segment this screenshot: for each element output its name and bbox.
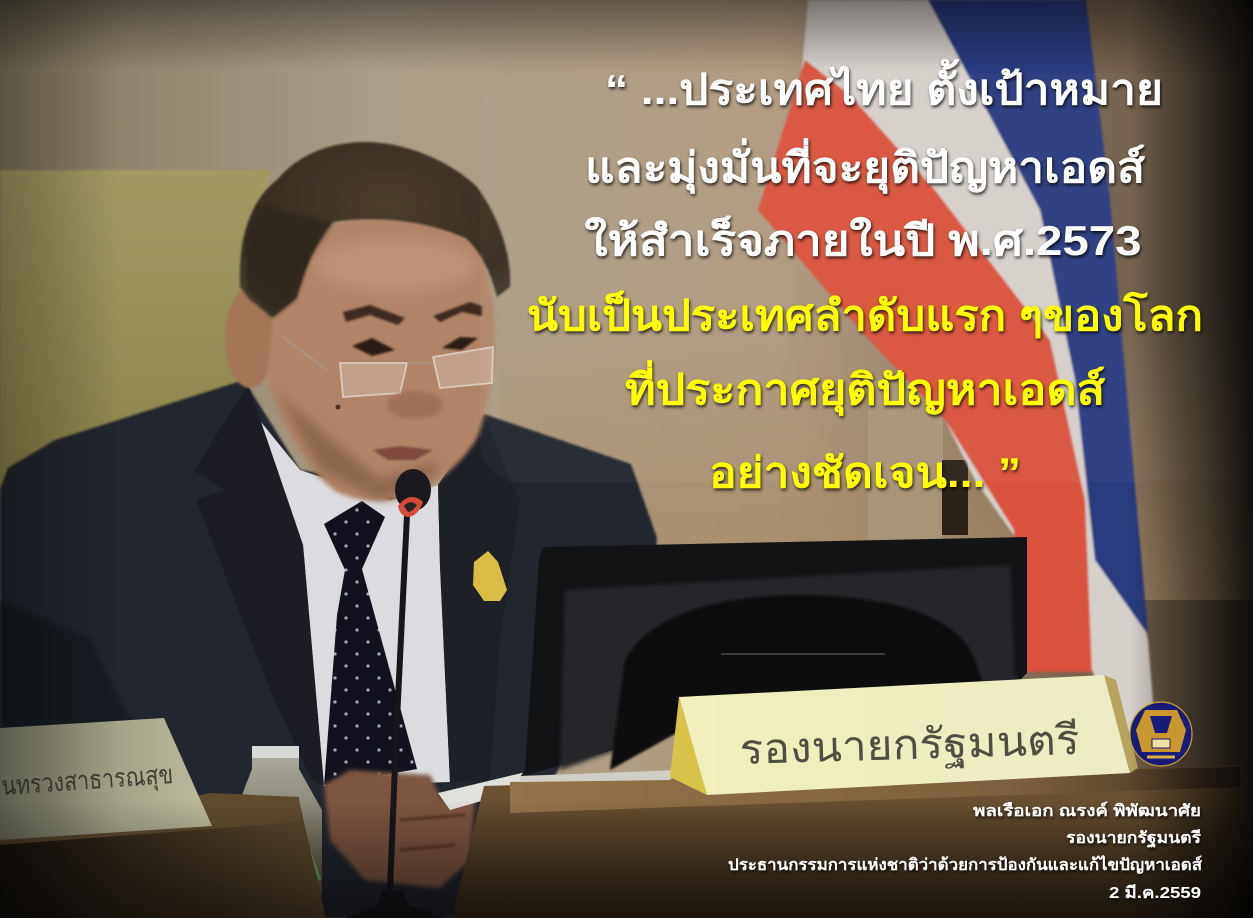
water bottle — [240, 746, 322, 895]
eyebrows — [343, 302, 482, 325]
man in suit — [0, 142, 657, 918]
quote line 1: “ ...ประเทศไทย ตั้งเป้าหมาย — [605, 58, 1163, 113]
dotted necktie — [324, 501, 417, 786]
left name plate — [0, 718, 212, 840]
deputy prime minister name plate: รองนายกรัฐมนตรี — [739, 716, 1080, 775]
monitor slot — [721, 653, 885, 655]
paper under hand — [438, 772, 526, 810]
quote line 3: ให้สำเร็จภายในปี พ.ศ.2573 — [584, 215, 1142, 264]
attribution — [728, 801, 1202, 902]
main desk lip — [510, 767, 1240, 813]
quote backing panel — [480, 73, 1253, 482]
jacket sleeve shading — [0, 600, 150, 740]
left lapel — [194, 385, 324, 786]
main desk — [452, 765, 1253, 918]
hair — [240, 142, 510, 317]
glasses arms — [283, 318, 513, 370]
government emblem — [1130, 702, 1192, 766]
left lens — [340, 363, 407, 397]
desk — [0, 765, 1253, 918]
finger shading — [400, 815, 465, 850]
lapel pin — [473, 551, 507, 601]
computer monitor — [520, 537, 1027, 777]
monitor inner frame — [560, 565, 1015, 770]
left desk — [0, 793, 326, 918]
jaw shadow — [275, 390, 440, 500]
microphone — [345, 469, 445, 918]
left desk lip — [0, 793, 301, 845]
forehead highlight — [315, 239, 475, 291]
thai flag — [758, 0, 1155, 740]
date: 2 มี.ค.2559 — [1109, 883, 1201, 902]
deputy prime minister name plate — [670, 675, 1138, 795]
monitor stand strip — [520, 770, 680, 782]
quote text — [527, 58, 1203, 496]
eyes — [352, 337, 478, 356]
hands — [324, 770, 475, 888]
speaker role: รองนายกรัฐมนตรี — [1066, 828, 1201, 848]
quote line 5 highlight: ที่ประกาศยุติปัญหาเอดส์ — [625, 360, 1105, 416]
ear — [225, 288, 275, 388]
shirt collar and front — [261, 422, 450, 786]
temple hair — [245, 205, 333, 318]
nose — [387, 391, 443, 419]
quote line 6 highlight: อย่างชัดเจน... ” — [709, 449, 1021, 496]
suit jacket — [0, 380, 657, 918]
mouth — [373, 446, 433, 460]
face — [267, 218, 495, 501]
monitor rear dome — [610, 595, 985, 770]
quote line 4 highlight: นับเป็นประเทศลำดับแรก ๆของโลก — [527, 290, 1203, 339]
quote line 2: และมุ่งมั่นที่จะยุติปัญหาเอดส์ — [585, 138, 1145, 194]
left name plate: นทรวงสาธารณสุข — [0, 759, 174, 802]
speaker name: พลเรือเอก ณรงค์ พิพัฒนาศัย — [973, 801, 1201, 820]
right lapel — [438, 414, 520, 782]
speaker committee: ประธานกรรมการแห่งชาติว่าด้วยการป้องกันและแก้ไขปัญหาเอดส์ — [728, 855, 1202, 875]
olive chair back — [0, 170, 270, 500]
glasses — [283, 318, 513, 397]
right lens — [433, 347, 493, 388]
mole — [336, 404, 340, 410]
